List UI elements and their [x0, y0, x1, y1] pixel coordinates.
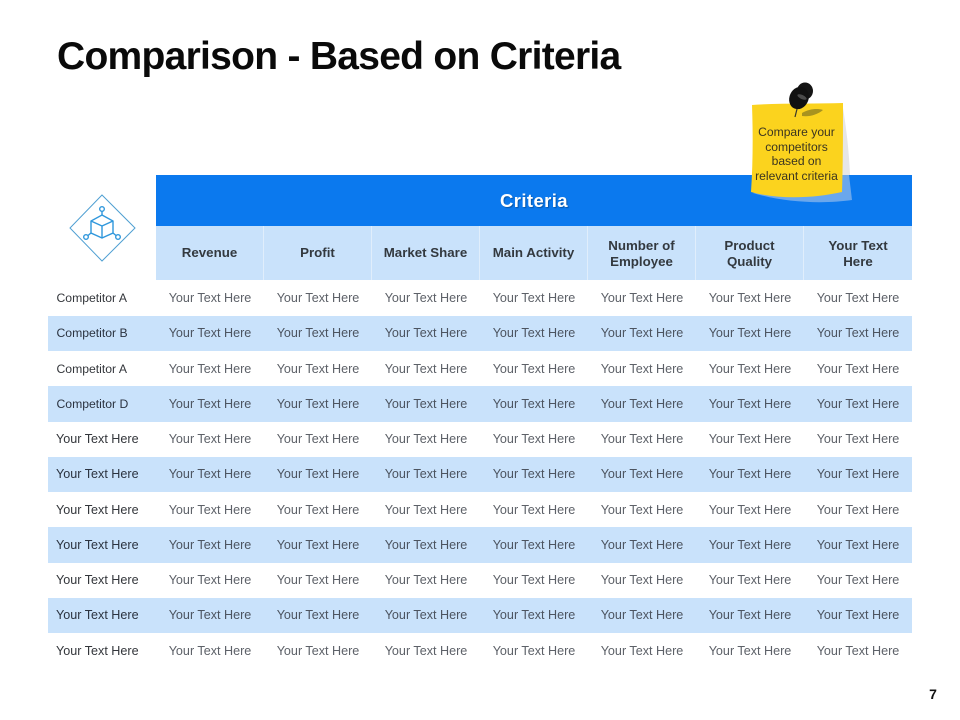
table rows: Your Text Here	[817, 432, 899, 446]
table rows: Your Text Here	[56, 644, 139, 658]
column header row: Your Text	[828, 238, 888, 253]
table rows: Your Text Here	[709, 291, 791, 305]
table rows: Your Text Here	[169, 397, 251, 411]
table rows: Your Text Here	[601, 503, 683, 517]
column header row: Here	[843, 254, 873, 269]
icon: cube in diamond	[69, 194, 136, 262]
table rows: Your Text Here	[493, 608, 575, 622]
table rows: Your Text Here	[277, 467, 359, 481]
sticky note callout	[751, 82, 852, 202]
table rows: Your Text Here	[277, 644, 359, 658]
table rows: Your Text Here	[277, 573, 359, 587]
column header row: Product	[724, 238, 775, 253]
table rows: Your Text Here	[385, 326, 467, 340]
table rows: Your Text Here	[493, 538, 575, 552]
table rows: Your Text Here	[493, 644, 575, 658]
table rows: Your Text Here	[493, 326, 575, 340]
table rows: Your Text Here	[493, 291, 575, 305]
page number: 7	[929, 686, 937, 702]
table rows: Your Text Here	[709, 538, 791, 552]
table rows: Your Text Here	[277, 503, 359, 517]
table rows: Your Text Here	[277, 397, 359, 411]
table rows: Your Text Here	[169, 608, 251, 622]
table rows: Your Text Here	[385, 397, 467, 411]
table rows: Your Text Here	[817, 608, 899, 622]
table rows: Your Text Here	[601, 538, 683, 552]
table rows: Your Text Here	[601, 291, 683, 305]
table rows: Your Text Here	[277, 608, 359, 622]
table rows: Your Text Here	[601, 467, 683, 481]
column header row: Revenue	[182, 245, 237, 260]
table rows: Your Text Here	[169, 644, 251, 658]
table rows: Your Text Here	[493, 432, 575, 446]
table rows: Your Text Here	[709, 573, 791, 587]
table rows: Your Text Here	[709, 467, 791, 481]
table rows: Your Text Here	[169, 503, 251, 517]
table rows: Your Text Here	[601, 397, 683, 411]
table rows: Your Text Here	[817, 503, 899, 517]
table rows: Your Text Here	[601, 608, 683, 622]
table rows: Your Text Here	[601, 432, 683, 446]
table rows: Your Text Here	[709, 608, 791, 622]
column header row: Number of	[608, 238, 675, 253]
table rows: Your Text Here	[817, 644, 899, 658]
table rows: Your Text Here	[385, 538, 467, 552]
table rows: Your Text Here	[56, 573, 139, 587]
table rows: Your Text Here	[169, 291, 251, 305]
table rows: Your Text Here	[493, 467, 575, 481]
table rows: Your Text Here	[56, 467, 139, 481]
header banner: Criteria	[156, 175, 912, 226]
table rows: Your Text Here	[817, 397, 899, 411]
table rows: Your Text Here	[385, 432, 467, 446]
table rows: Your Text Here	[601, 326, 683, 340]
table rows: Your Text Here	[169, 326, 251, 340]
table rows: Your Text Here	[817, 291, 899, 305]
table rows: Your Text Here	[709, 362, 791, 376]
table rows: Your Text Here	[56, 503, 139, 517]
table rows: Your Text Here	[277, 362, 359, 376]
table rows: Your Text Here	[601, 362, 683, 376]
table rows: Your Text Here	[169, 432, 251, 446]
table rows: Your Text Here	[601, 644, 683, 658]
table rows: Competitor A	[56, 291, 127, 305]
title: Comparison - Based on Criteria	[57, 35, 621, 78]
column header row: Profit	[300, 245, 335, 260]
table rows: Your Text Here	[169, 467, 251, 481]
table rows: Your Text Here	[277, 326, 359, 340]
sticky note text: relevant criteria	[755, 168, 838, 182]
table rows: Competitor B	[56, 326, 128, 340]
table rows: Your Text Here	[709, 432, 791, 446]
table rows: Your Text Here	[385, 573, 467, 587]
table rows: Your Text Here	[709, 644, 791, 658]
table rows: Your Text Here	[817, 573, 899, 587]
table rows: Your Text Here	[385, 467, 467, 481]
table rows: Your Text Here	[169, 573, 251, 587]
table rows: Your Text Here	[56, 608, 139, 622]
table rows: Your Text Here	[385, 362, 467, 376]
column header row: Quality	[727, 254, 772, 269]
table rows: Your Text Here	[493, 503, 575, 517]
table rows: Your Text Here	[817, 538, 899, 552]
table rows: Your Text Here	[169, 362, 251, 376]
table rows: Your Text Here	[169, 538, 251, 552]
table rows: Your Text Here	[385, 291, 467, 305]
table rows: Your Text Here	[385, 644, 467, 658]
table rows: Your Text Here	[493, 362, 575, 376]
table rows: Your Text Here	[601, 573, 683, 587]
column header row: Market Share	[384, 245, 467, 260]
table rows: Your Text Here	[56, 538, 139, 552]
table rows: Your Text Here	[56, 432, 139, 446]
table rows: Your Text Here	[709, 397, 791, 411]
sticky note text: based on	[772, 154, 821, 168]
table rows: Your Text Here	[493, 573, 575, 587]
table rows: Your Text Here	[277, 291, 359, 305]
header banner: Criteria: Criteria	[500, 190, 568, 211]
table rows: Competitor A	[56, 362, 127, 376]
sticky note text: Compare your	[758, 125, 835, 139]
table rows: Your Text Here	[385, 503, 467, 517]
sticky note text: competitors	[765, 140, 828, 154]
column header row	[156, 226, 912, 280]
table rows: Your Text Here	[385, 608, 467, 622]
table rows: Your Text Here	[277, 538, 359, 552]
table rows: Your Text Here	[709, 503, 791, 517]
table rows: Your Text Here	[709, 326, 791, 340]
column header row: Employee	[610, 254, 673, 269]
sticky note text	[755, 125, 838, 182]
table rows: Your Text Here	[817, 362, 899, 376]
table rows: Your Text Here	[817, 467, 899, 481]
table rows: Your Text Here	[493, 397, 575, 411]
table rows: Competitor D	[56, 397, 128, 411]
table rows: Your Text Here	[817, 326, 899, 340]
table rows: Your Text Here	[277, 432, 359, 446]
column header row: Main Activity	[493, 245, 574, 260]
